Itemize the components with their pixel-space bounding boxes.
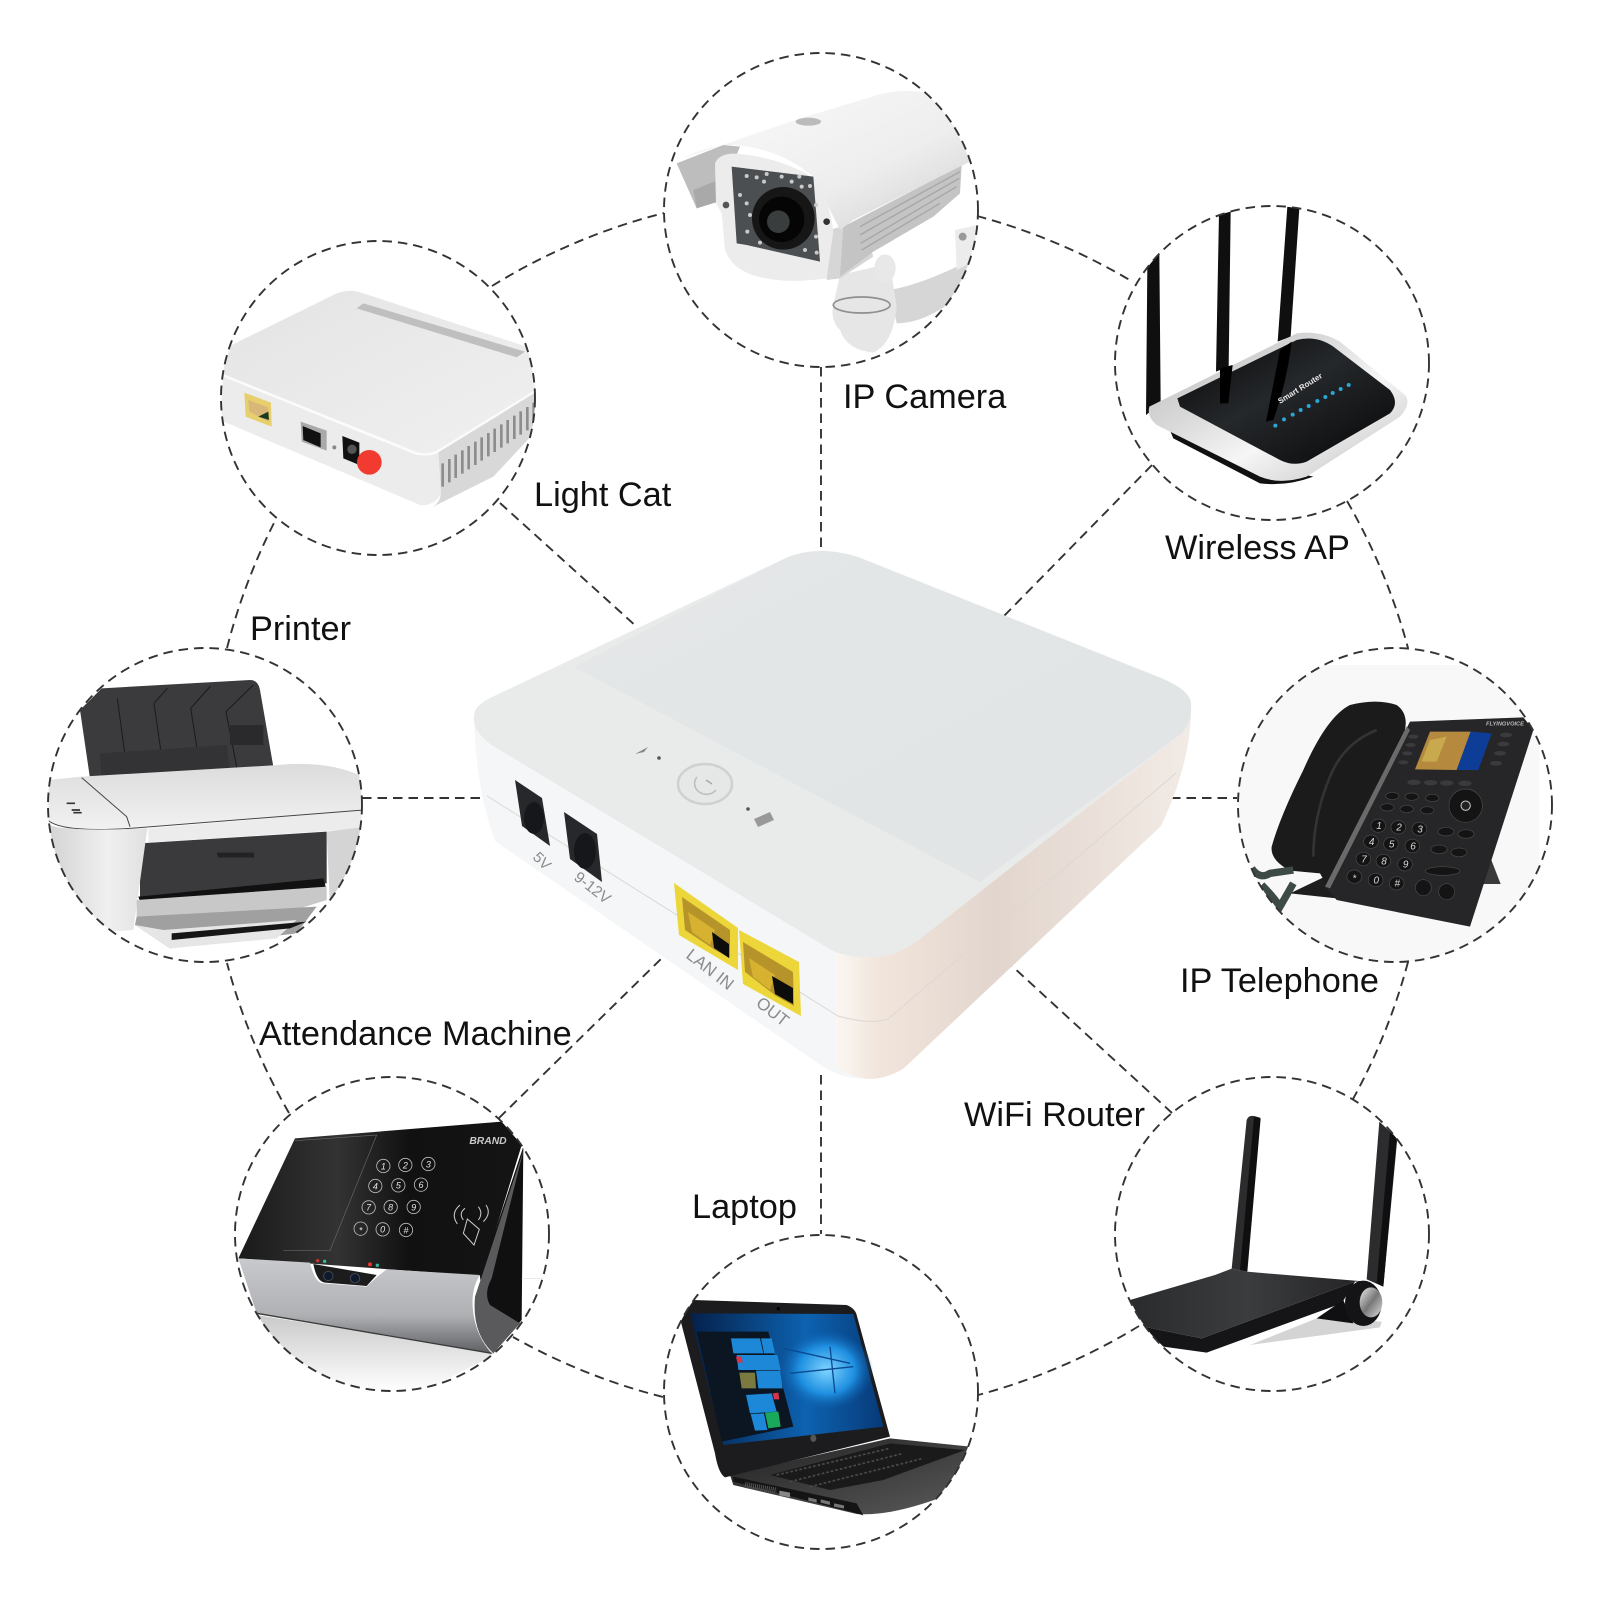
photo: desk phone [1252, 702, 1534, 927]
photo: desk phone: * [1352, 874, 1357, 885]
connector lines: ring arcs between device circles [227, 213, 1408, 1397]
photo: attendance terminal: 5 [396, 1181, 402, 1191]
photo: attendance terminal: 4 [373, 1181, 378, 1191]
dashed circle [235, 1077, 549, 1391]
photo: attendance terminal: 2 [402, 1160, 408, 1170]
photo: black router: Smart Router [1276, 371, 1324, 406]
photo: attendance terminal: BRAND [469, 1136, 507, 1147]
photo: attendance terminal: 6 [418, 1180, 423, 1190]
port labels [529, 849, 793, 1030]
photo: attendance terminal: 9 [411, 1202, 416, 1212]
photo: black router with two antennas [1130, 1116, 1397, 1353]
box top darker panel [574, 551, 1191, 882]
box left face [474, 716, 873, 1078]
photo: inkjet printer [48, 680, 367, 948]
photo: desk phone: 0 [1374, 875, 1380, 886]
dashed circle [664, 1235, 978, 1549]
dashed circle [664, 53, 978, 367]
photo: desk phone: 8 [1381, 856, 1387, 867]
OUT port [739, 930, 801, 1016]
label: IP Camera [843, 378, 1007, 416]
port labels: 9-12V [571, 869, 614, 908]
dashed circle [1115, 1077, 1429, 1391]
label: Laptop [692, 1188, 797, 1226]
photo: desk phone: 1 [1376, 821, 1382, 832]
photo: attendance terminal: * [359, 1225, 363, 1235]
port labels: 5V [529, 849, 554, 874]
photo: desk phone: 5 [1389, 839, 1395, 850]
port labels: LAN IN [683, 945, 737, 994]
port labels: OUT [753, 993, 793, 1030]
box top face [474, 551, 1191, 957]
photo: attendance terminal [238, 1122, 553, 1392]
photo: desk phone: # [1395, 879, 1401, 890]
connector lines: spokes from central box to devices [362, 367, 1237, 1234]
dashed circle [1115, 206, 1429, 520]
label: WiFi Router [964, 1096, 1145, 1134]
label: Light Cat [534, 476, 672, 514]
photo: desk phone: 3 [1417, 824, 1423, 835]
central ONU box [474, 551, 1191, 1079]
photo: desk phone: 6 [1410, 841, 1416, 852]
device: WiFi Router [964, 1077, 1429, 1391]
photo: attendance terminal: 3 [426, 1159, 431, 1169]
photo: optical modem [220, 291, 540, 507]
photo: desk phone: 4 [1369, 837, 1375, 848]
device: Laptop [664, 1188, 978, 1549]
photo: black router [1146, 207, 1407, 484]
LAN IN port [674, 883, 738, 970]
label: Wireless AP [1165, 529, 1350, 567]
photo: attendance terminal: 7 [366, 1203, 372, 1213]
dashed circle [1238, 648, 1552, 962]
device: Wireless AP [1115, 206, 1429, 567]
device: Light Cat [220, 241, 672, 555]
photo: attendance terminal: 1 [381, 1161, 386, 1171]
label: Printer [250, 610, 351, 648]
device: IP Camera [664, 53, 1007, 416]
photo: security camera [677, 91, 977, 353]
9-12V jack [564, 812, 602, 882]
photo: laptop with Windows screen [680, 1300, 970, 1515]
photo: desk phone: 7 [1361, 854, 1367, 865]
photo: attendance terminal: 0 [380, 1225, 385, 1235]
box seam line [487, 773, 1176, 1021]
dashed circle [48, 648, 362, 962]
photo: attendance terminal: # [403, 1225, 409, 1235]
photo: desk phone: FLYINGVOICE [1486, 721, 1524, 727]
photo: desk phone: 9 [1403, 860, 1409, 871]
photo: attendance terminal: 8 [388, 1202, 393, 1212]
label: Attendance Machine [259, 1015, 572, 1053]
device: Attendance Machine [235, 1015, 572, 1392]
device: IP Telephone [1180, 648, 1552, 1000]
device: Printer [48, 610, 367, 962]
photo: desk phone: 2 [1395, 823, 1402, 834]
label: IP Telephone [1180, 962, 1379, 1000]
dashed circle [221, 241, 535, 555]
indicator icons [635, 747, 774, 827]
power button [678, 764, 732, 804]
box right face [836, 705, 1191, 1079]
5V jack [515, 780, 550, 846]
